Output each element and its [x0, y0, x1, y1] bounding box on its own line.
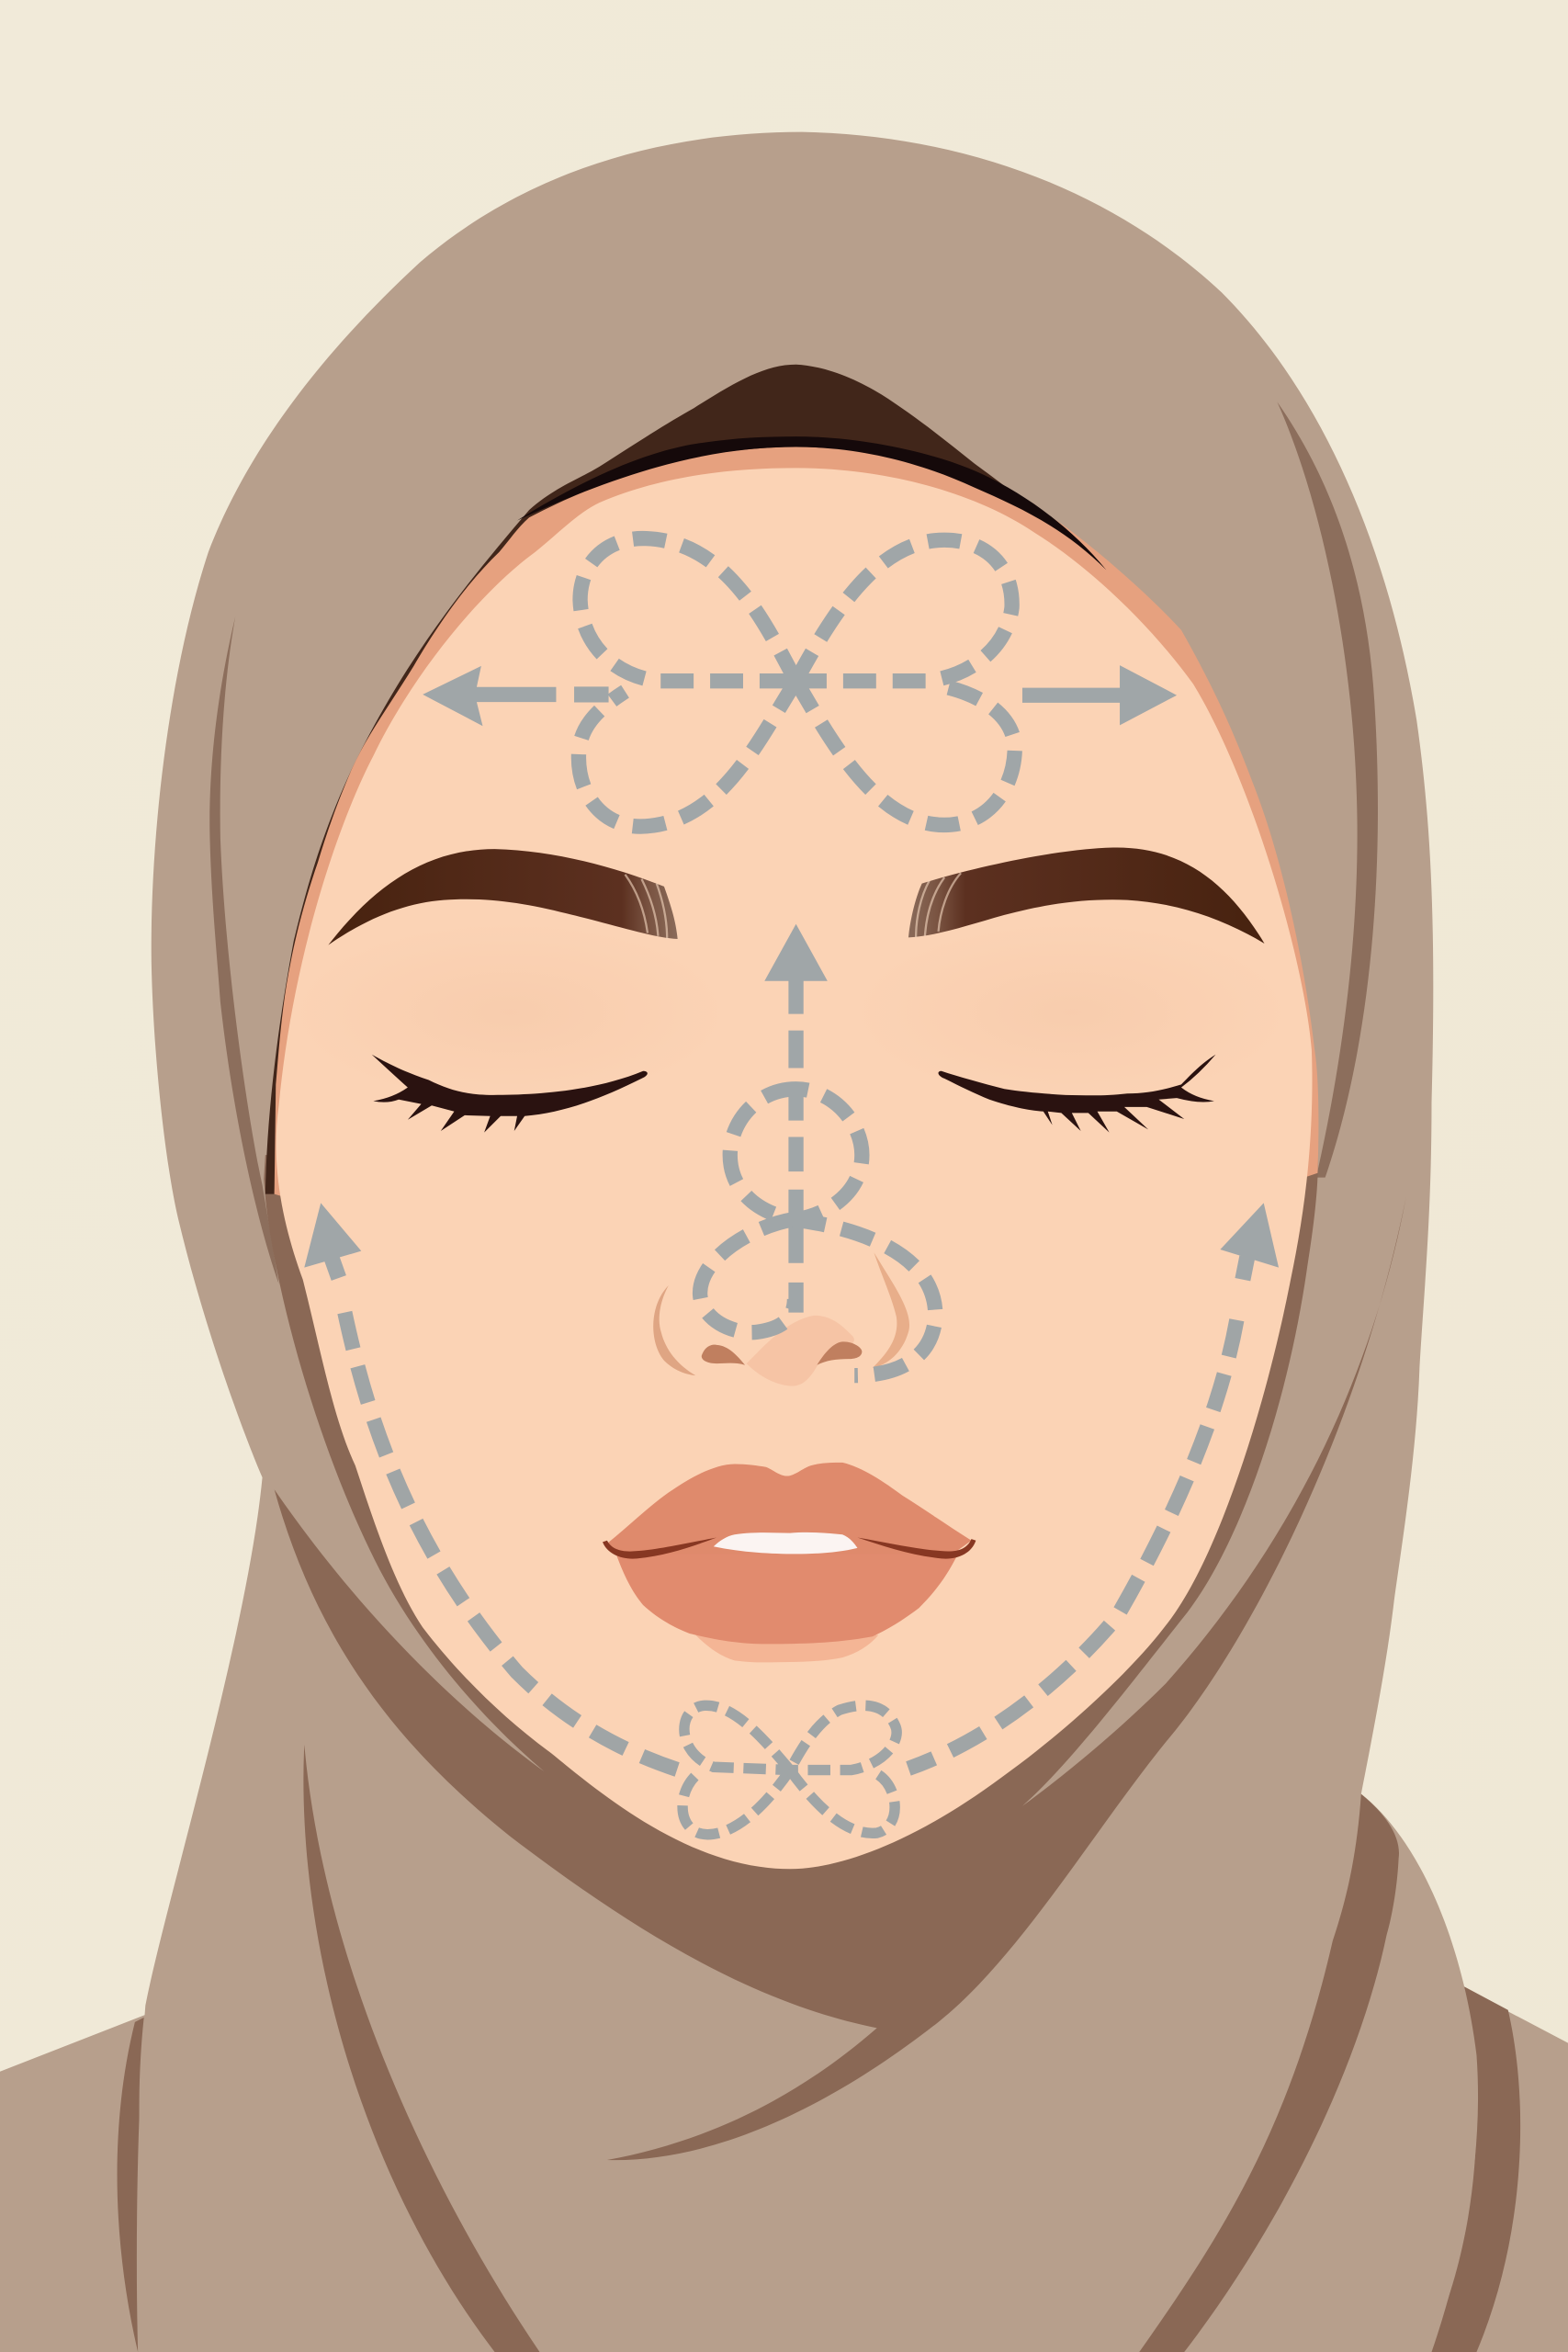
hijab: lower left fold — [303, 1745, 539, 2352]
hijab: shadow band around face and under chin — [264, 1155, 1406, 2160]
skin — [276, 468, 1313, 1869]
eyelid blush left — [292, 922, 727, 1102]
forehead massage path — [423, 538, 1177, 827]
hijab: neck fold — [1139, 1794, 1399, 2352]
hijab: upper right fold — [1277, 402, 1378, 1178]
right eyebrow — [908, 847, 1265, 944]
lips — [603, 1463, 976, 1662]
shoulders — [0, 1983, 1568, 2352]
hairline — [517, 436, 1106, 570]
nose — [653, 1252, 909, 1386]
left eyebrow — [328, 849, 678, 945]
skin shadow edge — [275, 447, 1318, 1350]
left arrow — [423, 666, 609, 726]
right closed eye with lashes — [939, 1055, 1215, 1133]
lower lip — [616, 1554, 958, 1644]
teeth — [714, 1532, 857, 1554]
left closed eye with lashes — [372, 1055, 648, 1133]
face — [275, 436, 1318, 1869]
eyelid blush right — [854, 922, 1289, 1102]
hair under hijab — [265, 365, 1117, 1194]
upper lip — [607, 1463, 971, 1563]
hijab: upper left fold — [209, 616, 279, 1284]
nose massage path — [700, 924, 935, 1375]
left jaw arrow — [304, 1203, 688, 1773]
right jaw arrow — [908, 1203, 1279, 1769]
mouth line left — [603, 1537, 716, 1559]
lower lip shadow — [694, 1634, 878, 1662]
chin knot — [682, 1705, 897, 1835]
mouth line right — [857, 1537, 976, 1559]
chin and jaw massage path — [304, 1203, 1279, 1835]
up arrow — [764, 924, 828, 981]
right arrow — [1022, 665, 1177, 725]
